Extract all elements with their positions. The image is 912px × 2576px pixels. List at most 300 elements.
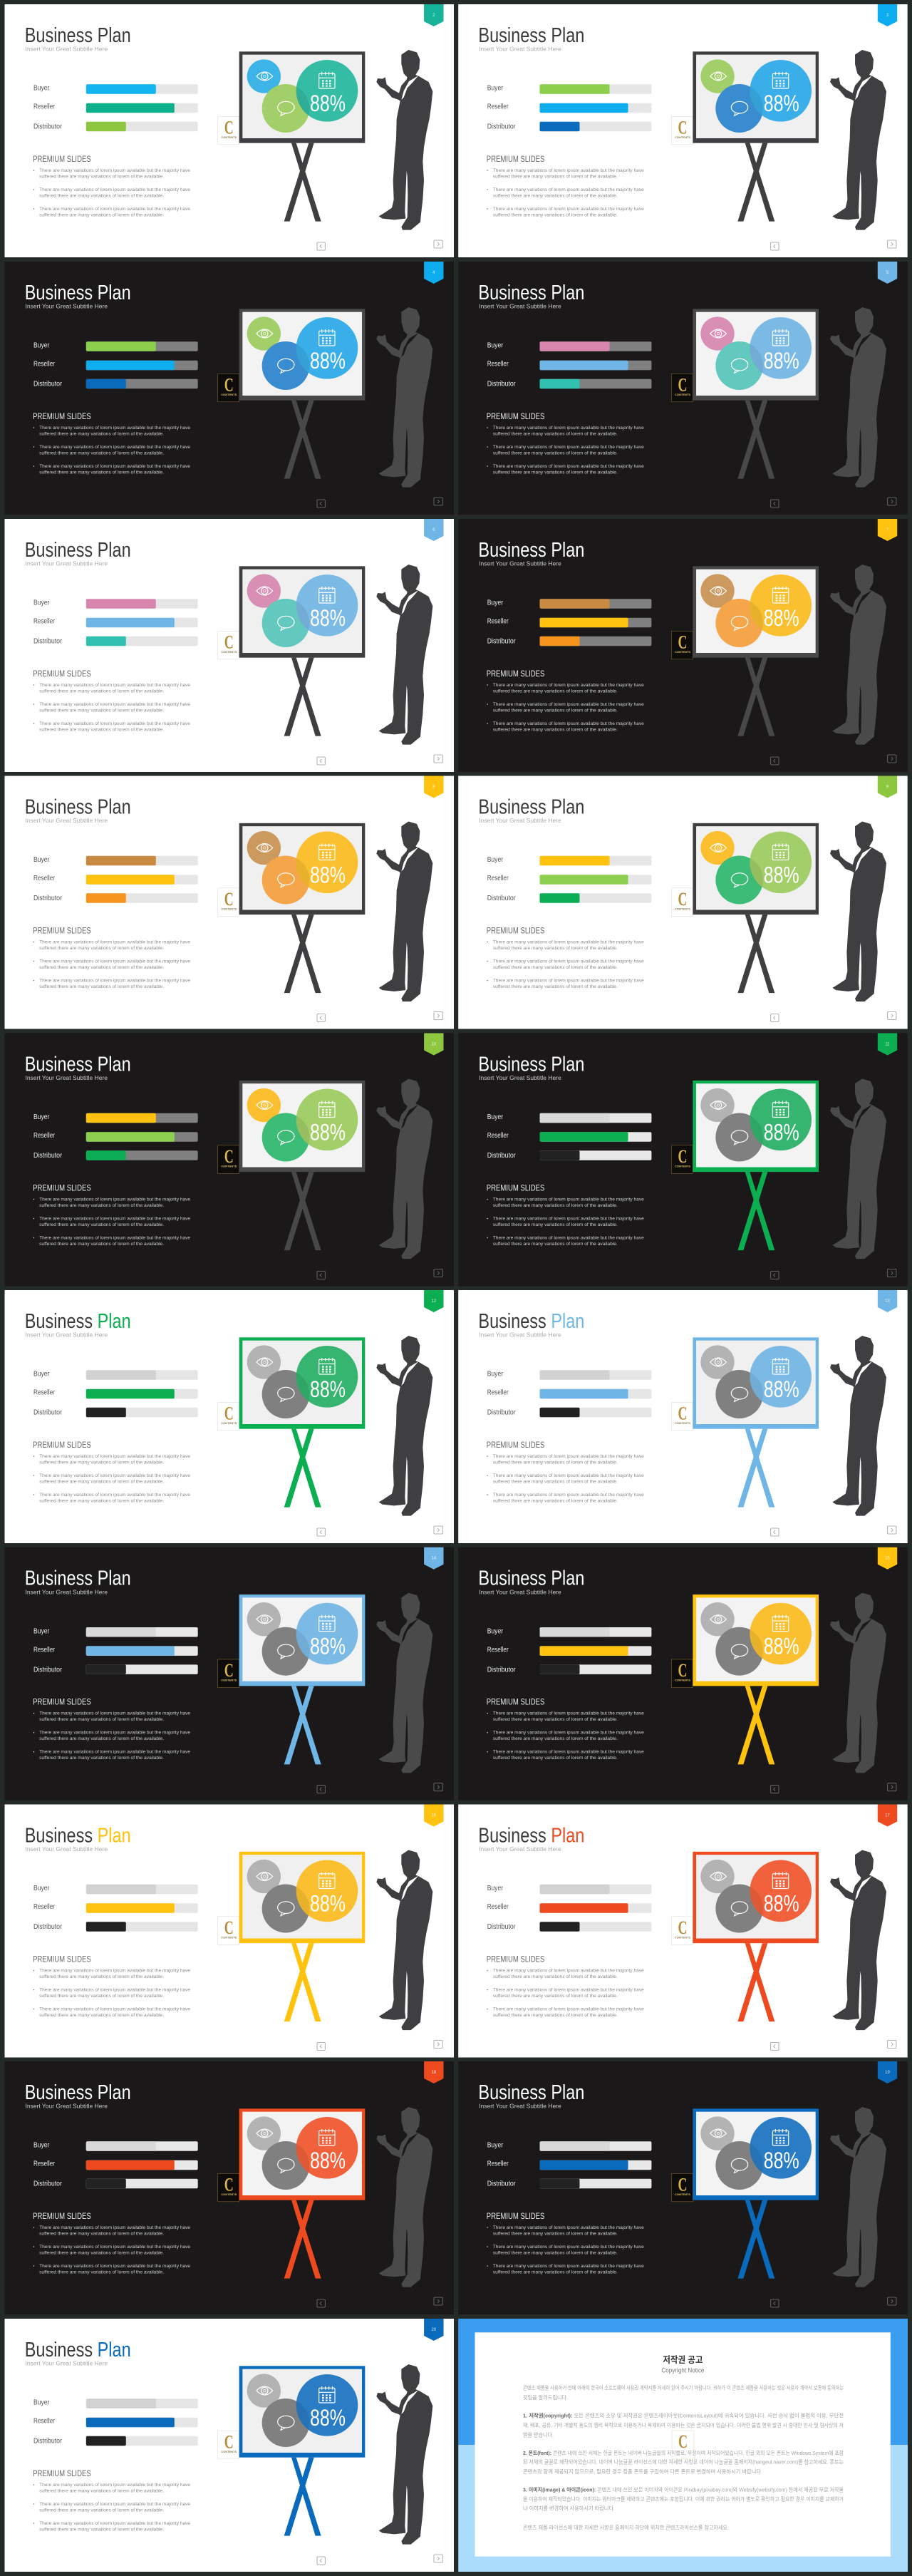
illustration: presenter and board: 88%: [764, 1890, 799, 1916]
text block: premium slides: There are many variations of lorem ipsum available but the majority have: [493, 1731, 644, 1736]
notice section 1: 1. 저작권(copyright): 모든 콘텐츠의 소유 및 저작권은 콘텐츠레이아웃(ContentsLayout)에 귀속되어 있습니다. 사전 승낙 없이 불법적 이용, 무단전: [523, 2412, 844, 2419]
text block: premium slides: There are many variations of lorem ipsum available but the majority have: [39, 187, 191, 192]
illustration: presenter and board: [671, 50, 886, 230]
text block: premium slides: There are many variations of lorem ipsum available but the majority have: [493, 1216, 644, 1222]
bar chart: Reseller: [33, 1132, 56, 1140]
text block: premium slides: suffered there are many variations of lorem of the available.: [39, 2489, 164, 2493]
bar chart: Reseller: [33, 875, 56, 882]
text block: premium slides: suffered there are many variations of lorem of the available.: [493, 432, 618, 436]
page tab: [878, 1290, 897, 1312]
text block: premium slides: PREMIUM SLIDES: [487, 1699, 545, 1707]
title: Business Plan: [478, 539, 584, 562]
text block: premium slides: PREMIUM SLIDES: [33, 927, 91, 935]
illustration: presenter and board: CONTENTS: [675, 1165, 691, 1168]
illustration: presenter and board: [218, 2107, 432, 2287]
text block: premium slides: suffered there are many variations of lorem of the available.: [493, 174, 618, 180]
illustration: presenter and board: 88%: [764, 862, 799, 888]
text block: premium slides: [33, 927, 191, 989]
page tab: 7: [886, 528, 889, 532]
text block: premium slides: PREMIUM SLIDES: [33, 2470, 91, 2478]
illustration: presenter and board: CONTENTS: [221, 1936, 237, 1939]
notice title: 저작권 공고: [663, 2354, 703, 2365]
text block: premium slides: suffered there are many variations of lorem of the available.: [39, 1756, 164, 1761]
page tab: [878, 2061, 897, 2083]
text block: premium slides: There are many variations of lorem ipsum available but the majority have: [39, 2521, 191, 2526]
text block: premium slides: PREMIUM SLIDES: [33, 155, 91, 164]
bar chart: Reseller: [33, 1389, 56, 1397]
title: Business Plan: [478, 1825, 584, 1848]
panel: slide 7: [458, 519, 908, 772]
bar chart: [487, 856, 651, 903]
title: Business Plan: [25, 1310, 131, 1333]
bar chart: Distributor: [33, 895, 63, 902]
page tab: [424, 519, 443, 541]
illustration: presenter and board: CONTENTS: [221, 908, 237, 911]
bar chart: [33, 1885, 198, 1932]
title: Business Plan: [478, 1053, 584, 1076]
page tab: 5: [886, 271, 889, 275]
illustration: presenter and board: [218, 2364, 432, 2545]
illustration: presenter and board: 88%: [310, 862, 346, 888]
panel: copyright notice: [458, 2319, 908, 2572]
text block: premium slides: There are many variations of lorem ipsum available but the majority have: [493, 939, 644, 945]
page tab: [878, 519, 897, 541]
text block: premium slides: There are many variations of lorem ipsum available but the majority have: [39, 1236, 191, 1240]
illustration: presenter and board: 88%: [764, 2148, 799, 2173]
text block: premium slides: There are many variations of lorem ipsum available but the majority have: [493, 187, 644, 192]
text block: premium slides: suffered there are many variations of lorem of the available.: [493, 1460, 618, 1465]
text block: premium slides: suffered there are many variations of lorem of the available.: [39, 2270, 164, 2275]
nav arrows: [317, 2297, 442, 2307]
text block: premium slides: [33, 155, 191, 218]
text block: premium slides: There are many variations of lorem ipsum available but the majority have: [39, 2483, 191, 2488]
text block: premium slides: suffered there are many variations of lorem of the available.: [39, 965, 164, 970]
title: Business Plan: [25, 539, 131, 562]
text block: premium slides: suffered there are many variations of lorem of the available.: [493, 2251, 618, 2255]
illustration: presenter and board: C: [678, 2174, 687, 2195]
text block: premium slides: There are many variations of lorem ipsum available but the majority have: [493, 1236, 644, 1240]
illustration: presenter and board: [218, 821, 432, 1001]
text block: premium slides: There are many variations of lorem ipsum available but the majority have: [39, 426, 191, 431]
title: Business Plan: [478, 795, 584, 818]
text block: premium slides: There are many variations of lorem ipsum available but the majority have: [493, 959, 644, 964]
illustration: presenter and board: C: [224, 1403, 234, 1423]
text block: premium slides: There are many variations of lorem ipsum available but the majority have: [39, 207, 191, 212]
text block: premium slides: There are many variations of lorem ipsum available but the majority have: [493, 445, 644, 450]
text block: premium slides: There are many variations of lorem ipsum available but the majority have: [39, 1216, 191, 1222]
text block: premium slides: suffered there are many variations of lorem of the available.: [39, 1203, 164, 1208]
subtitle: Insert Your Great Subtitle Here: [479, 1075, 561, 1081]
notice section 3: 3. 이미지(image) & 아이콘(icon): 콘텐츠 내에 쓰인 모든 이미지와 아이콘은 Pixabay(pixabay.com)와 Websify(websify.com) 등에서 제공된 무료 저작물: [523, 2486, 844, 2493]
illustration: presenter and board: 88%: [764, 91, 799, 116]
text block: premium slides: There are many variations of lorem ipsum available but the majority have: [39, 978, 191, 984]
bar chart: Reseller: [33, 1903, 56, 1911]
text block: premium slides: There are many variations of lorem ipsum available but the majority have: [493, 2007, 644, 2011]
text block: premium slides: [487, 155, 644, 218]
page tab: 13: [885, 1299, 890, 1304]
bar chart: Distributor: [33, 2180, 63, 2188]
text block: premium slides: There are many variations of lorem ipsum available but the majority have: [39, 1197, 191, 1202]
illustration: presenter and board: [218, 1078, 432, 1259]
nav arrows: [771, 240, 896, 250]
text block: premium slides: [33, 1185, 191, 1247]
bar chart: [33, 1370, 198, 1417]
notice section 2: 콘텐츠와 함께 제공되지 않으므로, 필요한 경우 정품 폰트를 구입하여 다른 폰트로 변경하여 사용하시기 바랍니다.: [523, 2468, 762, 2475]
title: Business Plan: [478, 1310, 584, 1333]
text block: premium slides: [487, 1185, 644, 1247]
bar chart: Buyer: [487, 1113, 504, 1121]
illustration: presenter and board: C: [224, 1917, 234, 1938]
title: Business Plan: [25, 795, 131, 818]
notice intro: 콘텐츠 제품을 사용하기 전에 아래의 한국어 소프트웨어 사용권 계약서를 자세히 읽어 주시기 바랍니다. 귀하가 이 콘텐츠 제품을 사용하는 것은 사용자 계약서 보증에 동의하는: [523, 2384, 844, 2391]
illustration: presenter and board: CONTENTS: [675, 393, 691, 396]
page tab: 19: [885, 2071, 890, 2075]
text block: premium slides: There are many variations of lorem ipsum available but the majority have: [39, 702, 191, 707]
illustration: presenter and board: [218, 565, 432, 745]
text block: premium slides: suffered there are many variations of lorem of the available.: [39, 212, 164, 218]
text block: premium slides: suffered there are many variations of lorem of the available.: [493, 212, 618, 218]
page tab: [424, 1034, 443, 1055]
panel: slide 6: [4, 519, 454, 772]
illustration: presenter and board: [218, 1336, 432, 1516]
text block: premium slides: There are many variations of lorem ipsum available but the majority have: [493, 683, 644, 688]
text block: premium slides: There are many variations of lorem ipsum available but the majority have: [493, 978, 644, 984]
illustration: presenter and board: C: [224, 374, 234, 395]
subtitle: Insert Your Great Subtitle Here: [479, 818, 561, 824]
bar chart: Buyer: [487, 342, 504, 350]
title: Business Plan: [25, 1825, 131, 1848]
nav arrows: [317, 1783, 442, 1793]
page tab: [424, 776, 443, 798]
panel: slide 11: [458, 1034, 908, 1286]
notice section 1: 벌을 받습니다.: [523, 2431, 554, 2438]
bar chart: [487, 84, 651, 131]
panel: slide 10: [4, 1034, 454, 1286]
illustration: presenter and board: CONTENTS: [675, 2193, 691, 2196]
text block: premium slides: suffered there are many variations of lorem of the available.: [493, 1756, 618, 1761]
illustration: presenter and board: 88%: [310, 1119, 346, 1145]
text block: premium slides: suffered there are many variations of lorem of the available.: [493, 1480, 618, 1484]
text block: premium slides: PREMIUM SLIDES: [33, 1185, 91, 1193]
text block: premium slides: suffered there are many variations of lorem of the available.: [493, 689, 618, 694]
page tab: 11: [885, 1042, 890, 1046]
bar chart: Distributor: [33, 1152, 63, 1160]
text block: premium slides: There are many variations of lorem ipsum available but the majority have: [39, 464, 191, 469]
bar chart: Reseller: [487, 1132, 509, 1140]
page tab: 15: [885, 1557, 890, 1561]
bar chart: Distributor: [487, 123, 516, 131]
text block: premium slides: suffered there are many variations of lorem of the available.: [493, 1717, 618, 1722]
nav arrows: [771, 1012, 896, 1022]
bar chart: Reseller: [487, 103, 509, 111]
illustration: presenter and board: C: [224, 1146, 234, 1167]
text block: premium slides: [33, 670, 191, 733]
bar chart: Buyer: [487, 599, 504, 607]
panel: slide 13: [458, 1290, 908, 1543]
text block: premium slides: PREMIUM SLIDES: [33, 413, 91, 421]
page tab: 14: [431, 1557, 437, 1561]
logo badge: [672, 2431, 694, 2459]
bar chart: Reseller: [487, 1389, 509, 1397]
page tab: [878, 262, 897, 284]
text block: premium slides: suffered there are many variations of lorem of the available.: [493, 194, 618, 198]
text block: premium slides: [33, 2212, 191, 2275]
text block: premium slides: There are many variations of lorem ipsum available but the majority have: [39, 959, 191, 964]
bar chart: Distributor: [487, 1409, 516, 1417]
text block: premium slides: There are many variations of lorem ipsum available but the majority have: [493, 1750, 644, 1755]
bar chart: Reseller: [33, 618, 56, 626]
panel: slide 20: [4, 2319, 454, 2572]
bar chart: Buyer: [487, 1885, 504, 1892]
text block: premium slides: There are many variations of lorem ipsum available but the majority have: [493, 2225, 644, 2230]
bar chart: Buyer: [487, 2142, 504, 2150]
title: Business Plan: [25, 24, 131, 47]
illustration: presenter and board: [218, 307, 432, 488]
text block: premium slides: There are many variations of lorem ipsum available but the majority have: [493, 1454, 644, 1459]
page tab: 20: [431, 2328, 437, 2332]
subtitle: Insert Your Great Subtitle Here: [479, 561, 561, 567]
illustration: presenter and board: CONTENTS: [221, 393, 237, 396]
text block: premium slides: suffered there are many variations of lorem of the available.: [39, 2013, 164, 2018]
bar chart: Distributor: [33, 638, 63, 646]
page tab: 9: [886, 785, 889, 790]
bar chart: Reseller: [33, 361, 56, 369]
bar chart: [33, 856, 198, 903]
illustration: presenter and board: 88%: [310, 348, 346, 373]
page tab: 17: [885, 1813, 890, 1818]
text block: premium slides: There are many variations of lorem ipsum available but the majority have: [39, 2245, 191, 2250]
bar chart: Distributor: [33, 1409, 63, 1417]
subtitle: Insert Your Great Subtitle Here: [479, 304, 561, 310]
nav arrows: [317, 498, 442, 508]
text block: premium slides: There are many variations of lorem ipsum available but the majority have: [39, 168, 191, 173]
notice section 1: 재, 배포, 공유, 기타 개별적 용도의 영리 목적으로 이용하거나 복제하여 이용하는 것은 금지되어 있습니다. 이러한 불법 행위 발견 시 중대한 민사 및 형사상의 처: [523, 2421, 844, 2428]
text block: premium slides: [487, 2212, 644, 2275]
illustration: presenter and board: C: [678, 1403, 687, 1423]
bar chart: Buyer: [33, 1113, 50, 1121]
page tab: [878, 1034, 897, 1055]
text block: premium slides: suffered there are many variations of lorem of the available.: [493, 946, 618, 951]
page tab: [424, 1547, 443, 1570]
illustration: presenter and board: 88%: [764, 1634, 799, 1659]
text block: premium slides: [487, 670, 644, 733]
notice section 2: 2. 폰트(font): 콘텐츠 내에 쓰인 서체는 한글 폰트는 네이버 나눔글꼴의 저작물로, 무상이며 저작되어있습니다. 한글 외의 모든 폰트는 Windows System에 포함: [523, 2449, 844, 2456]
text block: premium slides: suffered there are many variations of lorem of the available.: [493, 984, 618, 989]
subtitle: Insert Your Great Subtitle Here: [479, 1332, 561, 1339]
nav arrows: [317, 1269, 442, 1279]
page tab: 6: [432, 528, 435, 532]
bar chart: Reseller: [33, 1646, 56, 1654]
panel: slide 5: [458, 262, 908, 515]
illustration: presenter and board: C: [224, 2431, 234, 2452]
illustration: presenter and board: 88%: [764, 348, 799, 373]
text block: premium slides: suffered there are many variations of lorem of the available.: [39, 1994, 164, 1999]
text block: premium slides: suffered there are many variations of lorem of the available.: [39, 1717, 164, 1722]
text block: premium slides: There are many variations of lorem ipsum available but the majority have: [493, 464, 644, 469]
panel: slide 18: [4, 2061, 454, 2314]
illustration: presenter and board: 88%: [310, 91, 346, 116]
panel: slide 2: [4, 4, 454, 257]
bar chart: Reseller: [487, 618, 509, 626]
text block: premium slides: suffered there are many variations of lorem of the available.: [39, 194, 164, 198]
illustration: presenter and board: [671, 1336, 886, 1516]
bar chart: Distributor: [487, 381, 516, 388]
notice intro: [523, 2384, 844, 2401]
text block: premium slides: suffered there are many variations of lorem of the available.: [39, 984, 164, 989]
text block: premium slides: There are many variations of lorem ipsum available but the majority have: [39, 445, 191, 450]
bar chart: Reseller: [33, 2418, 56, 2426]
illustration: presenter and board: C: [678, 889, 687, 910]
text block: premium slides: suffered there are many variations of lorem of the available.: [39, 1974, 164, 1979]
subtitle: Insert Your Great Subtitle Here: [26, 46, 108, 53]
text block: premium slides: suffered there are many variations of lorem of the available.: [39, 689, 164, 694]
text block: premium slides: There are many variations of lorem ipsum available but the majority have: [493, 1969, 644, 1973]
text block: premium slides: suffered there are many variations of lorem of the available.: [493, 1994, 618, 1999]
text block: premium slides: suffered there are many variations of lorem of the available.: [39, 1222, 164, 1227]
bar chart: Buyer: [487, 85, 504, 93]
subtitle: Insert Your Great Subtitle Here: [26, 818, 108, 824]
logo badge: C: [678, 2431, 688, 2452]
illustration: presenter and board: 88%: [764, 605, 799, 631]
panel: slide 9: [458, 776, 908, 1029]
text block: premium slides: suffered there are many variations of lorem of the available.: [39, 432, 164, 436]
subtitle: Insert Your Great Subtitle Here: [26, 304, 108, 310]
text block: premium slides: PREMIUM SLIDES: [487, 1185, 545, 1193]
title: Business Plan: [478, 24, 584, 47]
title: Business Plan: [478, 1567, 584, 1590]
text block: premium slides: suffered there are many variations of lorem of the available.: [39, 1460, 164, 1465]
illustration: presenter and board: 88%: [310, 2148, 346, 2173]
illustration: presenter and board: [218, 50, 432, 230]
illustration: presenter and board: [671, 821, 886, 1001]
page tab: [878, 1805, 897, 1826]
bar chart: Reseller: [487, 1903, 509, 1911]
illustration: presenter and board: 88%: [310, 1890, 346, 1916]
title: Business Plan: [25, 2081, 131, 2104]
bar chart: Reseller: [487, 361, 509, 369]
text block: premium slides: There are many variations of lorem ipsum available but the majority have: [39, 1711, 191, 1716]
notice subtitle: Copyright Notice: [661, 2367, 704, 2374]
illustration: presenter and board: CONTENTS: [221, 2451, 237, 2453]
text block: premium slides: There are many variations of lorem ipsum available but the majority have: [39, 1731, 191, 1736]
text block: premium slides: [33, 2470, 191, 2532]
text block: premium slides: suffered there are many variations of lorem of the available.: [39, 2528, 164, 2532]
illustration: presenter and board: [218, 1593, 432, 1773]
bar chart: [33, 599, 198, 646]
text block: premium slides: PREMIUM SLIDES: [33, 1699, 91, 1707]
text block: premium slides: [33, 1956, 191, 2018]
text block: premium slides: suffered there are many variations of lorem of the available.: [493, 2270, 618, 2275]
nav arrows: [771, 1269, 896, 1279]
bar chart: Distributor: [487, 2180, 516, 2188]
text block: premium slides: PREMIUM SLIDES: [487, 1956, 545, 1964]
bar chart: Distributor: [33, 381, 63, 388]
illustration: presenter and board: C: [224, 632, 234, 652]
illustration: presenter and board: CONTENTS: [221, 1165, 237, 1168]
illustration: presenter and board: 88%: [764, 1376, 799, 1402]
page tab: [424, 1805, 443, 1826]
text block: premium slides: There are many variations of lorem ipsum available but the majority have: [39, 1493, 191, 1498]
text block: premium slides: suffered there are many variations of lorem of the available.: [39, 2231, 164, 2237]
text block: premium slides: There are many variations of lorem ipsum available but the majority have: [493, 702, 644, 707]
text block: premium slides: There are many variations of lorem ipsum available but the majority have: [493, 1711, 644, 1716]
illustration: presenter and board: C: [678, 632, 687, 652]
subtitle: Insert Your Great Subtitle Here: [26, 1589, 108, 1595]
text block: premium slides: [487, 927, 644, 989]
text block: premium slides: PREMIUM SLIDES: [487, 670, 545, 679]
text block: premium slides: There are many variations of lorem ipsum available but the majority have: [39, 683, 191, 688]
illustration: presenter and board: C: [678, 117, 687, 138]
illustration: presenter and board: [671, 1593, 886, 1773]
text block: premium slides: There are many variations of lorem ipsum available but the majority have: [493, 426, 644, 431]
title: Business Plan: [478, 282, 584, 304]
bar chart: Buyer: [33, 85, 50, 93]
text block: premium slides: suffered there are many variations of lorem of the available.: [39, 450, 164, 456]
bar chart: Reseller: [33, 2160, 56, 2168]
bar chart: [33, 1113, 198, 1160]
text block: premium slides: suffered there are many variations of lorem of the available.: [493, 1203, 618, 1208]
page tab: 12: [431, 1299, 437, 1304]
text block: premium slides: suffered there are many variations of lorem of the available.: [39, 709, 164, 713]
bar chart: Distributor: [33, 1923, 63, 1931]
bar chart: [487, 599, 651, 646]
illustration: presenter and board: C: [678, 1917, 687, 1938]
bar chart: Buyer: [33, 2142, 50, 2150]
bar chart: Reseller: [33, 103, 56, 111]
illustration: presenter and board: CONTENTS: [675, 1679, 691, 1682]
bar chart: Buyer: [487, 1371, 504, 1379]
bar chart: Distributor: [487, 638, 516, 646]
text block: premium slides: suffered there are many variations of lorem of the available.: [39, 2508, 164, 2513]
page tab: [878, 776, 897, 798]
nav arrows: [771, 755, 896, 765]
illustration: presenter and board: C: [678, 1660, 687, 1681]
panel: slide 16: [4, 1805, 454, 2057]
notice intro: 것임을 알려드립니다.: [523, 2394, 568, 2401]
title: Business Plan: [25, 1567, 131, 1590]
notice section 3: 나 이미지를 변경하여 사용하시기 바랍니다.: [523, 2505, 615, 2512]
illustration: presenter and board: CONTENTS: [221, 1679, 237, 1682]
bar chart: Distributor: [33, 2438, 63, 2446]
subtitle: Insert Your Great Subtitle Here: [479, 46, 561, 53]
page tab: 8: [432, 785, 435, 790]
bar chart: [33, 84, 198, 131]
page tab: [424, 262, 443, 284]
panel: slide 4: [4, 262, 454, 515]
text block: premium slides: suffered there are many variations of lorem of the available.: [493, 1242, 618, 1247]
subtitle: Insert Your Great Subtitle Here: [26, 2103, 108, 2110]
page tab: [424, 1290, 443, 1312]
illustration: presenter and board: C: [224, 117, 234, 138]
title: Business Plan: [25, 2339, 131, 2361]
text block: premium slides: suffered there are many variations of lorem of the available.: [39, 174, 164, 180]
illustration: presenter and board: [671, 1078, 886, 1259]
text block: premium slides: There are many variations of lorem ipsum available but the majority have: [493, 1493, 644, 1498]
text block: premium slides: There are many variations of lorem ipsum available but the majority have: [39, 939, 191, 945]
bar chart: Reseller: [487, 2160, 509, 2168]
illustration: presenter and board: CONTENTS: [221, 2193, 237, 2196]
illustration: presenter and board: CONTENTS: [675, 651, 691, 654]
text block: premium slides: There are many variations of lorem ipsum available but the majority have: [39, 2225, 191, 2230]
notice footer line: 콘텐츠 제품 라이선스에 대한 자세한 사항은 홈페이지 하단에 위치한 콘텐츠라이선스를 참고하세요.: [523, 2523, 729, 2530]
text block: premium slides: There are many variations of lorem ipsum available but the majority have: [39, 1969, 191, 1973]
text block: premium slides: PREMIUM SLIDES: [33, 2212, 91, 2221]
text block: premium slides: PREMIUM SLIDES: [33, 670, 91, 679]
nav arrows: [317, 1526, 442, 1536]
illustration: presenter and board: [218, 1850, 432, 2030]
nav arrows: [317, 240, 442, 250]
bar chart: Buyer: [33, 1885, 50, 1892]
